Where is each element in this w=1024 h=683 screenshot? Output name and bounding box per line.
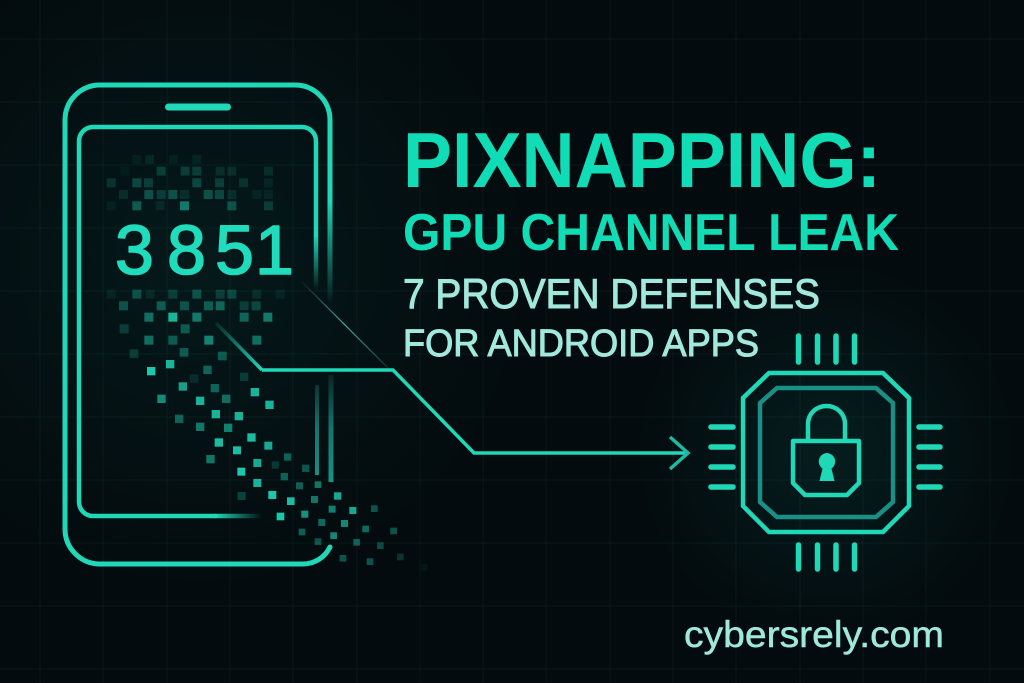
subheading line 1: 7 PROVEN DEFENSES [403,270,820,317]
pixels trail: lower [130,348,428,571]
arrow body [262,370,688,453]
icon: padlock [793,406,859,495]
icon: secure chip with lock [711,336,940,569]
dispersing pixels below the code [107,290,428,571]
heading line 2: GPU CHANNEL LEAK [403,204,899,262]
chip pins [711,336,940,569]
broken lower phone edges [317,375,331,482]
pixels row group: upper [107,290,285,345]
phone outline [65,85,331,564]
dim pixels above the code [107,155,273,210]
padlock keyhole [819,453,835,481]
title [403,116,899,365]
subheading line 2: FOR ANDROID APPS [403,323,759,365]
arrow faded start [216,323,262,370]
phone body frame [65,85,330,564]
arrow from phone to chip [216,323,688,469]
phone speaker [165,104,231,110]
chip outer frame [743,373,909,532]
chip inner frame [760,388,893,517]
heading line 1: PIXNAPPING: [403,116,881,204]
thin leak trace [302,282,388,368]
leaked code 3851: 3851 [115,211,294,289]
website url: cybersrely.com [684,614,944,655]
arrow head [670,437,688,469]
phone screen frame [79,127,316,516]
